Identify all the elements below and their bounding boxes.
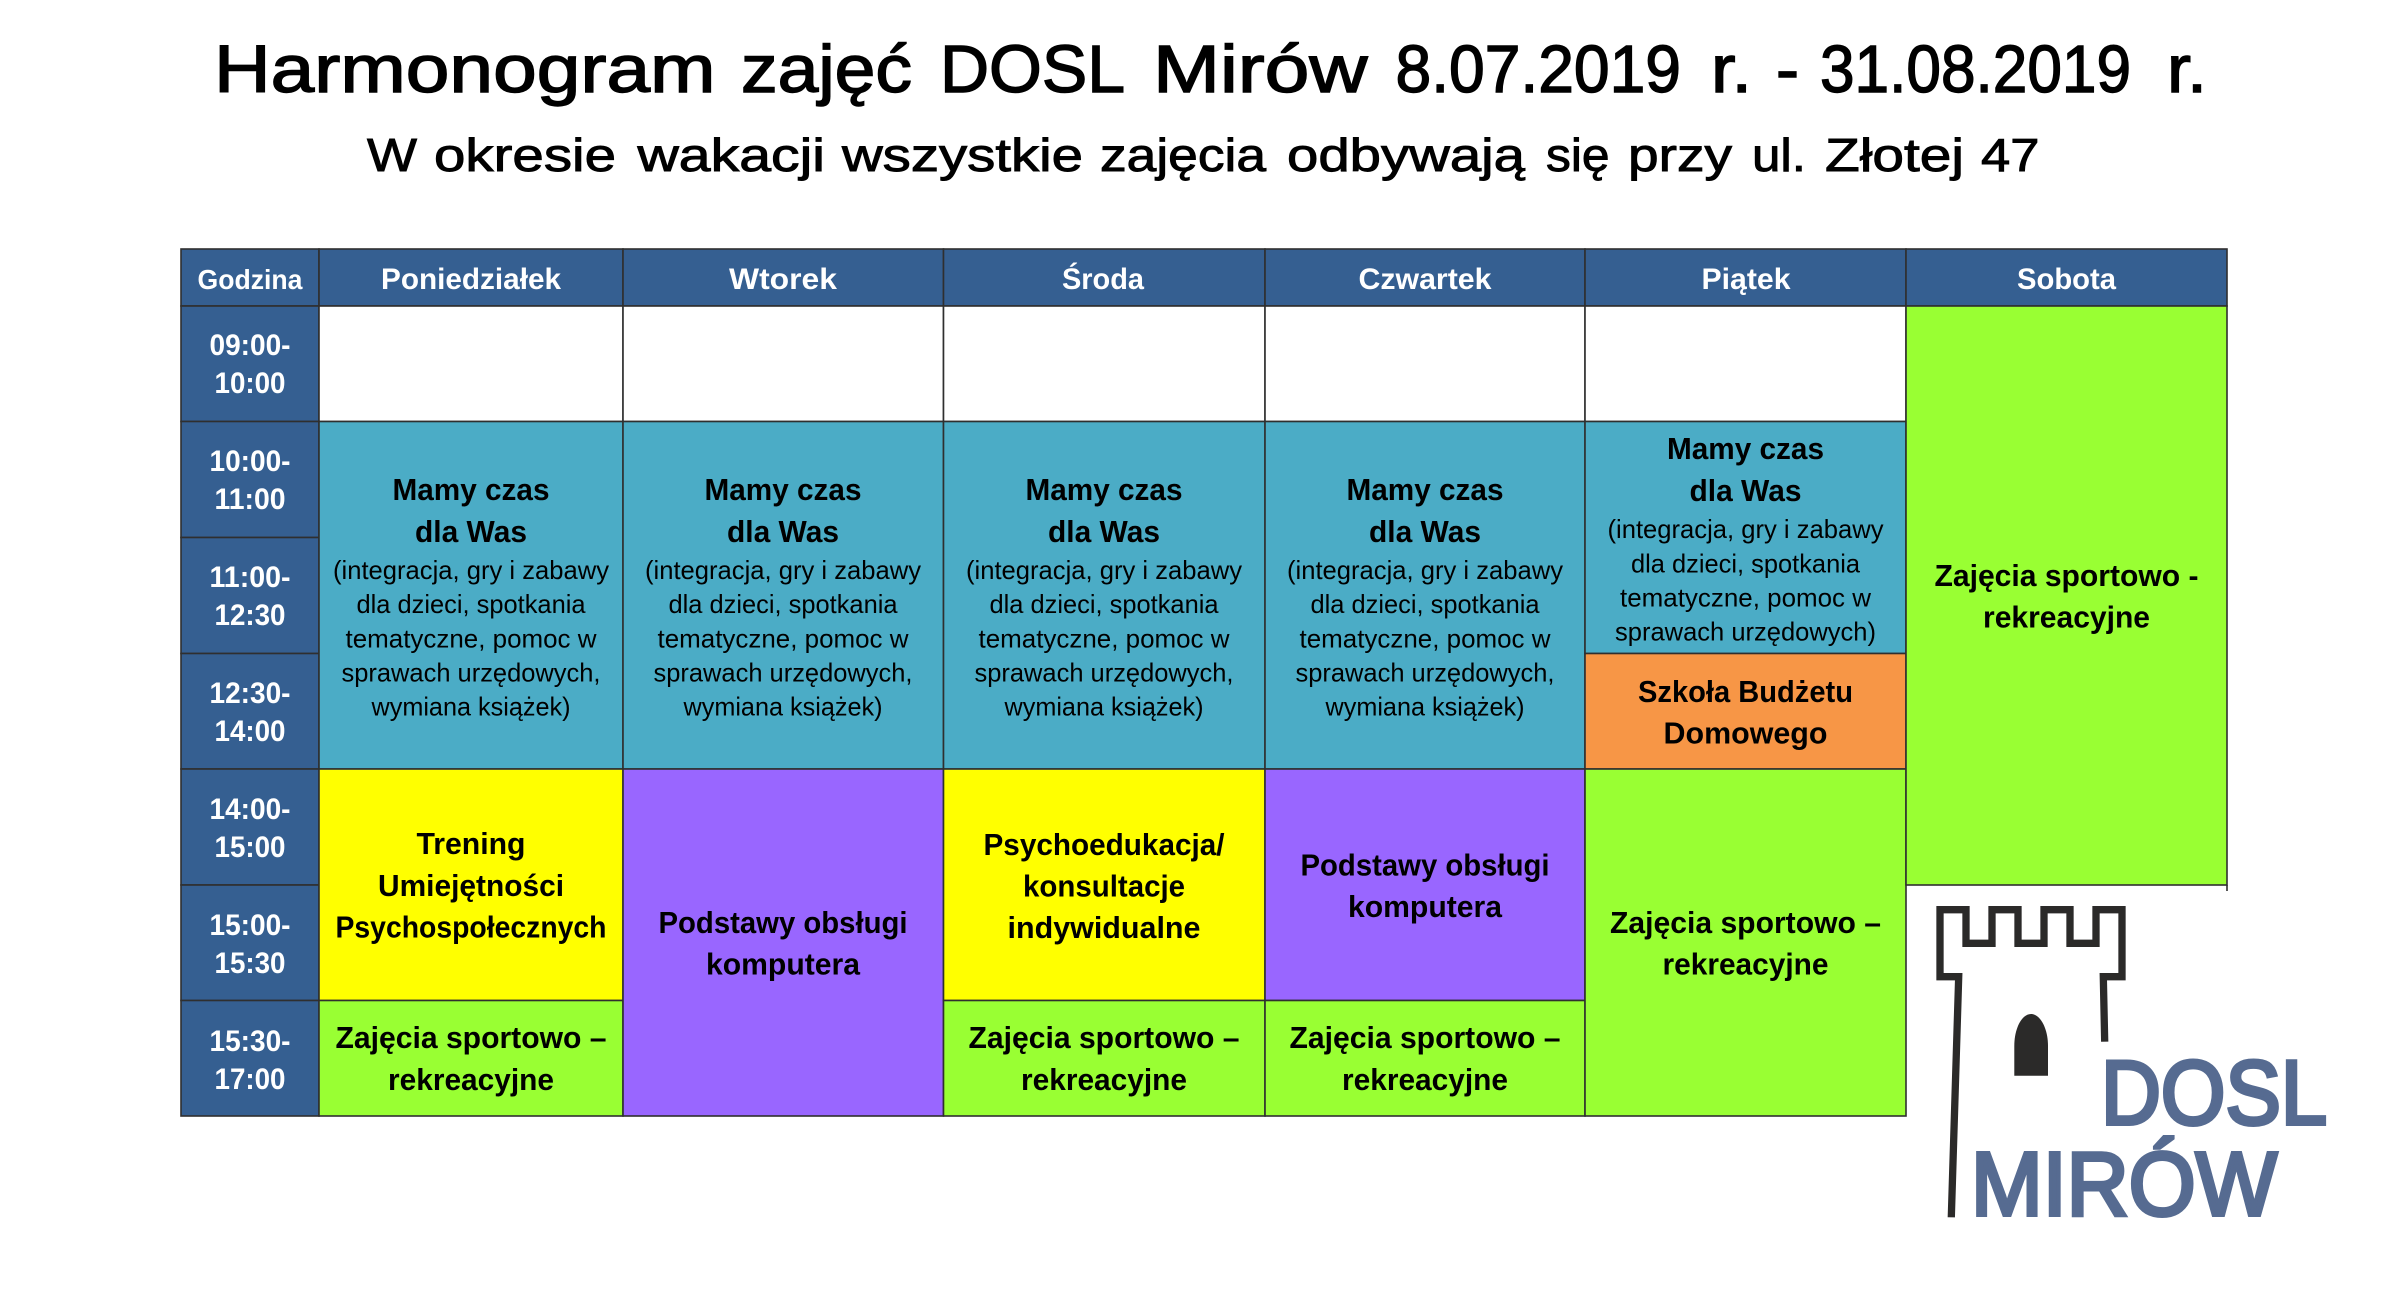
time 09:00-10:00: 09:00- (210, 329, 290, 362)
Czwartek: Mamy czas dla Was: (integracja, gry i zabawy (1287, 555, 1563, 585)
subtitle: 47 (1981, 129, 2040, 181)
icon: tower window (2014, 1014, 2048, 1076)
Piątek: Mamy czas dla Was: dla Was (1690, 473, 1802, 508)
Czwartek: Mamy czas dla Was: dla Was (1369, 514, 1481, 549)
logo text: MIRÓW: MIRÓW (1971, 1135, 2277, 1235)
subtitle: okresie (434, 129, 616, 181)
subtitle: wszystkie (841, 129, 1083, 181)
Piątek: Szkoła Budżetu Domowego (1585, 654, 1906, 769)
subtitle: odbywają (1287, 129, 1526, 181)
Piątek: Mamy czas dla Was (1585, 422, 1906, 654)
title: zajęć (741, 32, 912, 107)
Wtorek: Mamy czas dla Was: sprawach urzędowych, (654, 658, 912, 688)
header: Poniedziałek (319, 249, 623, 306)
time 12:30-14:00: 12:30- (210, 677, 290, 710)
title: DOSL (940, 32, 1125, 107)
Czwartek: Zajęcia sportowo-rekreacyjne: Zajęcia sportowo – (1290, 1020, 1560, 1055)
Poniedziałek: Zajęcia sportowo-rekreacyjne: rekreacyjne (388, 1062, 554, 1097)
Wtorek: Podstawy obsługi komputera: komputera (706, 946, 861, 982)
Sobota: Zajęcia sportowo-rekreacyjne (1906, 306, 2227, 891)
Środa: Zajęcia sportowo-rekreacyjne: Zajęcia sportowo – (968, 1020, 1240, 1055)
Środa: Zajęcia sportowo-rekreacyjne (944, 1000, 1265, 1116)
title: Harmonogram (214, 32, 716, 107)
time 15:30-17:00: 15:30- (210, 1025, 290, 1058)
Wtorek: Mamy czas dla Was: Mamy czas (704, 472, 862, 507)
subtitle: wakacji (636, 129, 825, 181)
subtitle: się (1546, 129, 1610, 181)
time 10:00-11:00: 10:00- (210, 445, 290, 478)
header: Czwartek (1265, 249, 1585, 306)
Piątek: Mamy czas dla Was: dla dzieci, spotkania (1631, 548, 1861, 578)
header: Środa: Środa (1062, 262, 1144, 296)
Wtorek: Mamy czas dla Was: wymiana książek) (683, 692, 882, 722)
title: r. (2167, 32, 2207, 107)
time 09:00-10:00 (181, 306, 319, 422)
time 11:00-12:30 (181, 538, 319, 654)
Czwartek: Mamy czas dla Was: dla dzieci, spotkania (1310, 589, 1540, 619)
header: Wtorek: Wtorek (729, 263, 837, 296)
Poniedziałek: Trening Umiejętności Psychospołecznych (319, 769, 623, 1000)
title: Mirów (1153, 32, 1368, 107)
Środa: Psychoedukacja konsultacje indywidualne: Psychoedukacja/ (984, 827, 1225, 862)
time 14:00-15:00: 14:00- (210, 793, 290, 826)
Środa: Mamy czas dla Was: (integracja, gry i zabawy (966, 555, 1242, 585)
header: Sobota (1906, 249, 2227, 306)
time 15:00-15:30: 15:00- (210, 909, 290, 942)
Czwartek: Podstawy obsługi komputera: komputera (1348, 889, 1503, 924)
Czwartek: Podstawy obsługi komputera (1265, 769, 1585, 1000)
Wtorek: Mamy czas dla Was: dla Was (727, 514, 839, 549)
Wtorek: Podstawy obsługi komputera: Podstawy obsługi (658, 905, 908, 940)
time 10:00-11:00 (181, 422, 319, 538)
Poniedziałek: Mamy czas dla Was: sprawach urzędowych, (342, 658, 600, 688)
Czwartek: Zajęcia sportowo-rekreacyjne: rekreacyjne (1342, 1062, 1508, 1097)
Poniedziałek: Trening Umiejętności Psychospołecznych: Trening (416, 826, 526, 861)
Środa: Mamy czas dla Was: wymiana książek) (1004, 692, 1204, 722)
empty morning cells (319, 306, 1906, 422)
Poniedziałek: Mamy czas dla Was: dla Was (415, 514, 527, 549)
Wtorek: Mamy czas dla Was: dla dzieci, spotkania (668, 589, 898, 619)
time 14:00-15:00 (181, 769, 319, 885)
Środa: Zajęcia sportowo-rekreacyjne: rekreacyjne (1021, 1062, 1187, 1097)
time 15:00-15:30: 15:30 (214, 947, 286, 980)
header: Piątek: Piątek (1702, 263, 1791, 296)
icon: tower outline (1940, 910, 2122, 1217)
title: 8.07.2019 (1396, 32, 1681, 107)
Środa: Mamy czas dla Was: dla Was (1048, 514, 1160, 549)
header: Sobota: Sobota (2017, 263, 2116, 296)
time 15:30-17:00: 17:00 (214, 1063, 286, 1096)
Poniedziałek: Mamy czas dla Was: wymiana książek) (371, 692, 570, 722)
Piątek: Mamy czas dla Was: sprawach urzędowych) (1615, 616, 1876, 646)
subtitle: przy (1628, 129, 1732, 181)
Piątek: Mamy czas dla Was: tematyczne, pomoc w (1620, 582, 1871, 612)
Poniedziałek: Mamy czas dla Was: tematyczne, pomoc w (346, 624, 597, 654)
Piątek: Zajęcia sportowo-rekreacyjne (1585, 769, 1906, 1116)
header: Piątek (1585, 249, 1906, 306)
header: Godzina: Godzina (198, 264, 303, 295)
time 12:30-14:00: 14:00 (214, 715, 286, 748)
Piątek: Szkoła Budżetu Domowego: Szkoła Budżetu (1638, 674, 1853, 709)
title: r. (1711, 32, 1752, 107)
Środa: Mamy czas dla Was: dla dzieci, spotkania (990, 589, 1219, 619)
Poniedziałek: Mamy czas dla Was: Mamy czas (392, 472, 550, 507)
logo text: DOSL: DOSL (2101, 1043, 2327, 1144)
Środa: Mamy czas dla Was: tematyczne, pomoc w (978, 624, 1230, 654)
Poniedziałek: Mamy czas dla Was: (integracja, gry i zabawy (333, 555, 609, 585)
subtitle: ul. (1752, 129, 1806, 181)
header: Wtorek (623, 249, 944, 306)
Poniedziałek: Mamy czas dla Was: dla dzieci, spotkania (356, 589, 586, 619)
Piątek: Zajęcia sportowo-rekreacyjne: Zajęcia sportowo – (1610, 905, 1881, 940)
Środa: Psychoedukacja konsultacje indywidualne: konsultacje (1023, 868, 1185, 904)
time 15:00-15:30 (181, 885, 319, 1000)
Wtorek: Mamy czas dla Was: tematyczne, pomoc w (658, 624, 909, 654)
Piątek: Szkoła Budżetu Domowego: Domowego (1664, 716, 1828, 750)
Środa: Mamy czas dla Was: Mamy czas (1026, 472, 1182, 507)
Sobota: Zajęcia sportowo-rekreacyjne: rekreacyjne (1983, 600, 2150, 634)
Sobota: Zajęcia sportowo-rekreacyjne: Zajęcia sportowo - (1934, 558, 2198, 593)
time 14:00-15:00: 15:00 (214, 831, 286, 864)
header row (181, 249, 2227, 306)
Poniedziałek: Zajęcia sportowo-rekreacyjne: Zajęcia sportowo – (336, 1020, 606, 1055)
Czwartek: Mamy czas dla Was: wymiana książek) (1325, 692, 1524, 722)
Czwartek: Zajęcia sportowo-rekreacyjne (1265, 1000, 1585, 1116)
Czwartek: Mamy czas dla Was: sprawach urzędowych, (1296, 658, 1554, 688)
header: Poniedziałek: Poniedziałek (381, 263, 561, 296)
time 15:30-17:00 (181, 1000, 319, 1116)
time 09:00-10:00: 10:00 (214, 367, 286, 400)
subtitle: Złotej (1825, 129, 1964, 181)
title (214, 32, 2207, 107)
time 10:00-11:00: 11:00 (214, 483, 286, 516)
header: Godzina (181, 249, 319, 306)
header: Czwartek: Czwartek (1358, 263, 1492, 296)
Środa: Mamy czas dla Was: sprawach urzędowych, (974, 658, 1234, 688)
Poniedziałek: Zajęcia sportowo-rekreacyjne (319, 1000, 623, 1116)
time column (181, 306, 319, 1116)
Wtorek: Podstawy obsługi komputera (623, 769, 944, 1116)
schedule table (181, 249, 2227, 1116)
Poniedziałek: Mamy czas dla Was (319, 422, 623, 769)
Czwartek: Mamy czas dla Was: Mamy czas (1346, 472, 1504, 507)
Poniedziałek: Trening Umiejętności Psychospołecznych: Psychospołecznych (336, 910, 606, 944)
subtitle (367, 129, 2040, 181)
Poniedziałek: Trening Umiejętności Psychospołecznych: Umiejętności (378, 868, 564, 903)
Piątek: Mamy czas dla Was: (integracja, gry i zabawy (1608, 514, 1884, 544)
time 11:00-12:30: 11:00- (210, 561, 290, 594)
Środa: Mamy czas dla Was (944, 422, 1265, 769)
subtitle: W (367, 129, 418, 181)
Środa: Psychoedukacja konsultacje indywidualne: indywidualne (1008, 910, 1200, 945)
time 11:00-12:30: 12:30 (214, 599, 286, 632)
title: 31.08.2019 (1820, 32, 2131, 107)
Piątek: Mamy czas dla Was: Mamy czas (1667, 431, 1824, 466)
title: - (1776, 32, 1799, 107)
Czwartek: Mamy czas dla Was: tematyczne, pomoc w (1300, 624, 1551, 654)
subtitle: zajęcia (1100, 129, 1266, 181)
Czwartek: Mamy czas dla Was (1265, 422, 1585, 769)
Czwartek: Podstawy obsługi komputera: Podstawy obsługi (1300, 848, 1550, 882)
header: Środa (944, 249, 1265, 306)
logo: DOSL Mirów tower (1940, 910, 2327, 1235)
Środa: Psychoedukacja konsultacje indywidualne (944, 769, 1265, 1000)
Wtorek: Mamy czas dla Was (623, 422, 944, 769)
Wtorek: Mamy czas dla Was: (integracja, gry i zabawy (645, 555, 921, 585)
time 12:30-14:00 (181, 654, 319, 769)
Piątek: Zajęcia sportowo-rekreacyjne: rekreacyjne (1662, 946, 1828, 982)
